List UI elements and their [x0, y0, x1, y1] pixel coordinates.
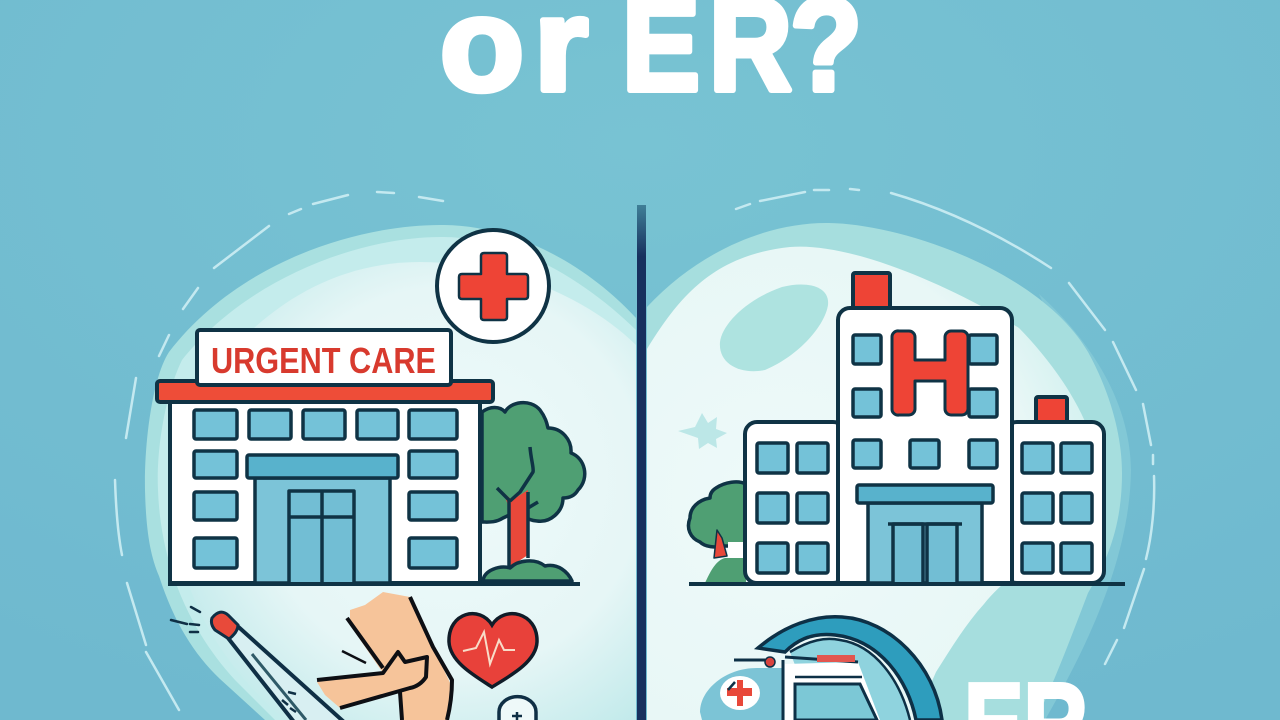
entrance: [857, 485, 993, 583]
medical cross bubble: [700, 668, 782, 720]
divider: [637, 205, 646, 720]
icon: tree left: [168, 403, 585, 584]
decoration blob: [720, 284, 828, 371]
vehicle: [785, 662, 880, 720]
central tower: [838, 308, 1012, 583]
windows: [757, 335, 1092, 573]
ground: [168, 582, 580, 586]
panel: emergency room backdrop: [647, 223, 1131, 720]
icon: ambulance: [700, 617, 942, 720]
ground: [689, 582, 1125, 586]
title: [440, 0, 862, 118]
sign: urgent care: [197, 330, 451, 385]
roof band: [157, 381, 493, 402]
icon: small bottle: [499, 697, 536, 720]
icon: medical cross badge: [437, 230, 549, 342]
icon: tree right: [688, 482, 746, 583]
icon: star: [678, 413, 727, 449]
dashed orbit: right: [736, 189, 1154, 664]
icon: injured arm: [317, 592, 452, 720]
letter H: [892, 331, 968, 415]
panel: urgent care backdrop: [145, 225, 636, 720]
wings: [745, 422, 845, 583]
illustration: urgent care building: [157, 230, 549, 583]
entrance: [247, 455, 398, 583]
icon: heart with pulse: [449, 614, 537, 687]
windows: [194, 410, 457, 568]
building body: [170, 400, 480, 583]
rooftop blocks: [853, 273, 890, 310]
illustration: hospital building: [688, 273, 1125, 584]
icon: thermometer: [171, 607, 344, 720]
sign: urgent care: URGENT CARE: [211, 340, 436, 381]
dashed orbit: left: [115, 192, 443, 710]
